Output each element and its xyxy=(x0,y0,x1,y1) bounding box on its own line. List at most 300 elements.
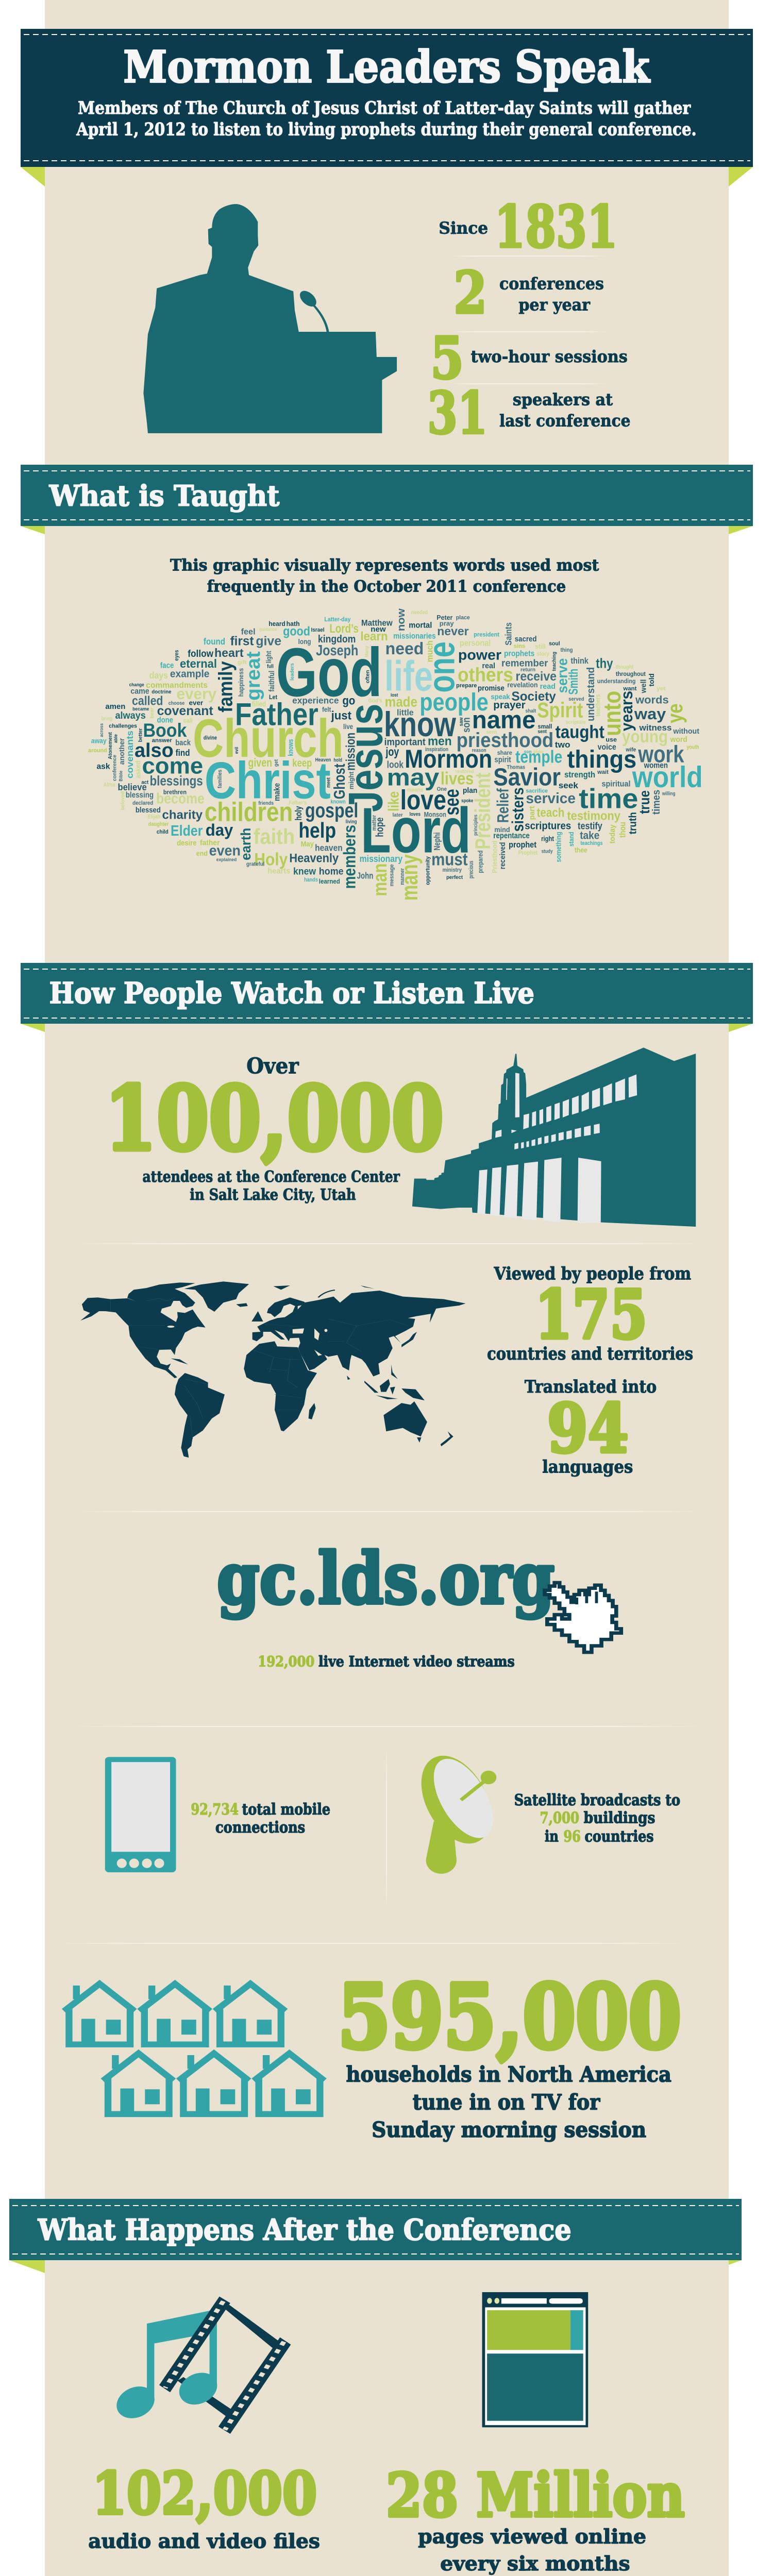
word cloud: repentance xyxy=(493,832,530,840)
word cloud: family xyxy=(214,661,237,713)
word cloud: home xyxy=(319,866,344,877)
word cloud: ask xyxy=(97,762,110,771)
word cloud: share xyxy=(497,749,512,756)
word cloud: times xyxy=(650,790,662,815)
word cloud intro text xyxy=(170,556,599,596)
word cloud: testimony xyxy=(567,809,621,823)
word cloud: get xyxy=(274,759,279,767)
word cloud: new xyxy=(371,625,386,633)
word cloud: beloved xyxy=(120,791,126,810)
word cloud: Nephi xyxy=(432,833,442,851)
word cloud: later xyxy=(393,812,403,818)
word cloud: may xyxy=(387,765,439,791)
word cloud: must xyxy=(431,850,468,869)
word cloud: face xyxy=(160,662,174,670)
word cloud: God’s xyxy=(368,698,382,704)
word cloud: many xyxy=(397,854,423,901)
word cloud: guidance xyxy=(259,626,277,632)
word cloud: Ghost xyxy=(330,764,348,799)
word cloud: made xyxy=(385,694,417,710)
stat: 595,000 households: Sunday morning session xyxy=(372,2117,646,2142)
word cloud: meet xyxy=(326,777,331,788)
word cloud: great xyxy=(242,651,264,701)
website callout: gc.lds.org xyxy=(217,1537,621,1670)
stat: 102,000 files: 102,000 xyxy=(92,2460,317,2528)
word cloud: hath xyxy=(287,620,300,628)
stat: mobile connections: connections xyxy=(215,1818,305,1836)
word cloud: Lord xyxy=(361,795,471,867)
word cloud: Church xyxy=(193,708,344,769)
header ribbon xyxy=(21,29,753,187)
word cloud: told xyxy=(648,673,656,686)
word cloud: strength xyxy=(564,770,595,779)
word cloud: want xyxy=(623,685,637,692)
word cloud: seen xyxy=(486,730,497,735)
word cloud: seek xyxy=(559,781,578,790)
word cloud: experience xyxy=(292,696,339,706)
word cloud: joy xyxy=(385,745,399,758)
word cloud: earth xyxy=(238,828,254,860)
section heading: How People Watch or Listen Live xyxy=(21,963,753,1032)
word cloud: served xyxy=(568,697,584,702)
word cloud: covenants xyxy=(125,731,135,778)
word cloud: found xyxy=(204,636,225,647)
stat: 175 countries, 94 languages: languages xyxy=(542,1457,633,1477)
word cloud: days xyxy=(149,670,168,681)
word cloud: came xyxy=(130,687,149,696)
word cloud: evil xyxy=(234,747,239,754)
stat: 100,000 attendees: attendees at the Conference Center xyxy=(142,1168,400,1186)
stat: live video streams: 192,000 xyxy=(258,1653,314,1670)
word cloud: young xyxy=(622,726,668,747)
word cloud: part xyxy=(528,806,536,820)
word cloud: one xyxy=(422,641,462,693)
word cloud: charity xyxy=(162,808,203,822)
word cloud: temple xyxy=(515,747,562,767)
section heading: How People Watch or Listen Live: How People Watch or Listen Live xyxy=(49,976,534,1010)
icon: Conference Center building xyxy=(412,1047,696,1227)
stat: 175 countries, 94 languages: Translated into xyxy=(525,1377,657,1397)
word cloud: happiness xyxy=(237,668,245,697)
word cloud: something xyxy=(554,832,563,862)
word cloud: help xyxy=(298,818,336,842)
word cloud: felt xyxy=(322,706,331,713)
word cloud: way xyxy=(634,705,666,723)
word cloud: thou xyxy=(618,822,628,838)
word cloud: Lord’s xyxy=(329,622,359,635)
word cloud: explained xyxy=(216,857,237,862)
word cloud: Peter xyxy=(436,614,453,621)
section heading: What is Taught xyxy=(21,465,753,534)
icon: web browser xyxy=(482,2292,588,2427)
stat: 595,000 households: households in North America xyxy=(346,2061,671,2087)
word cloud: never xyxy=(437,625,469,638)
word cloud: back xyxy=(175,738,191,748)
word cloud: place xyxy=(456,615,470,621)
word cloud: power xyxy=(458,647,501,663)
word cloud: needed xyxy=(411,610,428,616)
word cloud: restored xyxy=(456,769,474,775)
word cloud: know xyxy=(384,704,456,744)
word cloud: Bible xyxy=(118,771,123,782)
word cloud: daughter xyxy=(148,821,169,827)
word cloud: teach xyxy=(536,805,564,820)
word cloud: Society xyxy=(512,689,556,704)
word cloud: plan xyxy=(463,787,477,795)
word cloud: day xyxy=(206,821,233,839)
word cloud: Smith xyxy=(566,669,581,694)
word cloud: speak xyxy=(491,693,510,701)
word cloud: kingdom xyxy=(318,633,356,645)
word cloud: Holy xyxy=(254,850,288,869)
word cloud: every xyxy=(176,685,216,703)
word cloud: around xyxy=(88,748,107,754)
world map xyxy=(80,1281,466,1458)
word cloud: time xyxy=(579,783,638,814)
word cloud: wife xyxy=(625,747,636,753)
word cloud: heard xyxy=(268,620,285,628)
word cloud: receive xyxy=(515,669,557,684)
word cloud: children xyxy=(205,796,293,826)
word cloud: across xyxy=(99,723,104,737)
word cloud: scripture xyxy=(565,720,586,725)
word cloud: knew xyxy=(293,866,316,877)
word cloud: child xyxy=(157,829,169,835)
stat: mobile connections: total mobile xyxy=(242,1800,330,1819)
word cloud: youth xyxy=(687,744,699,751)
word cloud: full xyxy=(267,664,274,670)
word cloud: well xyxy=(640,680,648,693)
word cloud: two xyxy=(555,740,570,750)
word cloud: just xyxy=(331,709,351,722)
word cloud: ye xyxy=(664,704,687,723)
word cloud: people xyxy=(419,688,489,716)
word cloud: long xyxy=(298,638,311,646)
word cloud: Savior xyxy=(493,763,561,791)
word cloud: always xyxy=(115,710,146,721)
word cloud: thought xyxy=(616,664,634,670)
stat list: conference facts: two-hour sessions xyxy=(471,347,628,366)
word cloud: story xyxy=(536,651,550,657)
word cloud: ever xyxy=(189,699,203,707)
word cloud: President xyxy=(472,773,495,850)
word cloud: thee xyxy=(575,846,587,854)
word cloud: word xyxy=(670,736,687,744)
website callout: gc.lds.org: gc.lds.org xyxy=(217,1537,554,1620)
word cloud: example xyxy=(170,669,209,680)
word cloud: thy xyxy=(596,656,613,671)
word cloud: brethren xyxy=(163,789,187,796)
word cloud: Book xyxy=(143,720,187,741)
stat: 175 countries, 94 languages: 94 xyxy=(547,1389,629,1468)
word cloud: hold xyxy=(333,757,342,763)
word cloud: able xyxy=(113,734,119,743)
word cloud: done xyxy=(157,716,173,725)
word cloud: willing xyxy=(662,791,676,796)
word cloud: change xyxy=(129,682,144,687)
word cloud: Thomas xyxy=(507,764,525,770)
word cloud: Christ xyxy=(205,751,331,809)
word cloud: also xyxy=(135,739,174,761)
word cloud: son xyxy=(461,717,473,733)
word cloud: Priesthood xyxy=(491,841,498,873)
word cloud: Let xyxy=(269,693,277,701)
word cloud: learned xyxy=(319,877,340,885)
word cloud: became xyxy=(132,706,149,711)
word cloud: men xyxy=(428,734,452,748)
word cloud: heaven xyxy=(315,842,343,853)
word cloud: challenges xyxy=(109,723,137,729)
word cloud: Monson xyxy=(424,810,446,819)
word cloud: asked xyxy=(134,761,142,778)
word cloud: prophets xyxy=(504,649,534,658)
word cloud: opportunity xyxy=(424,856,431,885)
word cloud: make xyxy=(273,783,281,801)
word cloud: Heavenly xyxy=(289,852,339,866)
word cloud: go xyxy=(342,694,355,707)
word cloud: priesthood xyxy=(457,728,553,751)
word cloud: Alma xyxy=(104,782,115,788)
word cloud: remember xyxy=(501,658,548,669)
word cloud: president xyxy=(474,631,500,638)
word cloud: Elijah xyxy=(147,814,160,820)
word cloud: taught xyxy=(556,722,604,742)
word cloud: spoke xyxy=(461,798,473,804)
word cloud: things xyxy=(567,745,636,773)
word cloud: serve xyxy=(554,658,570,693)
word cloud: without xyxy=(673,727,699,736)
word cloud: Heaven xyxy=(315,757,331,762)
word cloud: world xyxy=(632,760,703,794)
word cloud: sent xyxy=(538,729,547,735)
stat list: conference facts: 31 xyxy=(427,379,488,447)
icon: hand cursor xyxy=(545,1583,621,1652)
word cloud: throughout xyxy=(616,670,646,677)
stat: 175 countries, 94 languages: 175 xyxy=(535,1275,647,1354)
stat: 595,000 households xyxy=(338,1966,681,2142)
word cloud: small xyxy=(538,723,552,730)
word cloud: hope xyxy=(374,817,385,837)
word cloud: little xyxy=(397,708,414,718)
word cloud: find xyxy=(176,748,190,758)
word cloud: Matthew xyxy=(361,619,393,628)
stat: satellite broadcasts: in xyxy=(545,1827,559,1845)
word cloud: service xyxy=(526,790,576,807)
word cloud: testify xyxy=(578,821,602,832)
word cloud: manner xyxy=(399,868,406,885)
stat list: conference facts: 5 xyxy=(430,325,464,393)
word cloud: Saints xyxy=(503,622,514,646)
word cloud: bear xyxy=(149,707,155,718)
word cloud: years xyxy=(617,691,636,731)
word cloud: read xyxy=(540,682,556,691)
word cloud: today xyxy=(608,824,617,843)
word cloud: matter xyxy=(372,815,377,831)
stat: live video streams: live Internet video streams xyxy=(318,1653,515,1670)
word cloud: use xyxy=(606,736,617,743)
word cloud: words xyxy=(635,693,669,706)
stat: 28 Million pages: pages viewed online xyxy=(418,2525,646,2548)
stat: satellite broadcasts xyxy=(514,1791,680,1845)
word cloud: Many xyxy=(364,646,369,657)
word cloud: learn xyxy=(360,629,388,643)
word cloud: saw xyxy=(459,717,464,726)
word cloud: precious xyxy=(468,861,475,878)
word cloud: act xyxy=(141,779,149,785)
word cloud: light xyxy=(265,651,273,663)
word cloud: Israel xyxy=(311,627,325,633)
stat list: conference facts: 2 xyxy=(453,259,487,327)
word cloud: John xyxy=(357,871,373,881)
stat: 595,000 households: tune in on TV for xyxy=(413,2089,600,2114)
word cloud: choose xyxy=(169,701,185,706)
stat: mobile connections: 92,734 xyxy=(191,1800,239,1819)
word cloud: scriptures xyxy=(525,820,571,832)
word cloud: living xyxy=(346,819,357,824)
stat: 100,000 attendees: Over xyxy=(246,1053,299,1079)
word cloud: sacred xyxy=(515,635,536,643)
word cloud: better xyxy=(138,728,144,742)
word cloud: true xyxy=(636,790,652,814)
word cloud: doctrine xyxy=(152,689,172,695)
word cloud: eternal xyxy=(180,657,217,670)
word cloud: Spirit xyxy=(537,698,583,722)
word cloud: stand xyxy=(567,832,575,846)
word cloud intro text: frequently in the October 2011 conference xyxy=(207,577,566,596)
word cloud: man xyxy=(369,863,391,896)
word cloud: answer xyxy=(152,738,172,744)
word cloud: others xyxy=(458,664,513,686)
word cloud: life xyxy=(384,653,433,700)
word cloud: gospel xyxy=(305,799,358,822)
word cloud: live xyxy=(343,722,353,731)
word cloud: Latter-day xyxy=(324,616,351,623)
word cloud: inspiration xyxy=(425,747,448,753)
word cloud: mission xyxy=(343,733,358,771)
word cloud: even xyxy=(209,842,241,858)
word cloud: covenant xyxy=(157,704,213,718)
word cloud: blessings xyxy=(149,773,203,788)
word cloud: desire xyxy=(177,839,197,848)
word cloud: called xyxy=(132,693,163,708)
stat list: conference facts xyxy=(427,193,630,447)
stat: satellite broadcasts: countries xyxy=(585,1827,653,1845)
word cloud: sacrifice xyxy=(526,787,548,794)
stat list: conference facts: per year xyxy=(518,296,591,315)
word cloud: eyes xyxy=(174,650,180,661)
word cloud: lives xyxy=(441,769,474,788)
word cloud: prayer xyxy=(493,700,525,711)
word cloud: prophet xyxy=(509,840,536,850)
word cloud: given xyxy=(248,756,272,769)
stat: 175 countries, 94 languages xyxy=(487,1264,693,1477)
word cloud: Jesus xyxy=(339,704,393,812)
word cloud: take xyxy=(580,829,599,841)
word cloud: follow xyxy=(188,649,213,659)
word cloud: witness xyxy=(638,723,672,733)
stat list: conference facts: speakers at xyxy=(513,390,613,409)
word cloud: leaders xyxy=(290,663,295,681)
word cloud: pray xyxy=(440,620,454,628)
word cloud: name xyxy=(472,706,535,734)
word cloud: important xyxy=(384,737,426,748)
stat: 28 Million pages xyxy=(386,2460,685,2575)
word cloud: Prophet xyxy=(518,849,538,856)
word cloud: bring xyxy=(102,716,112,722)
word cloud: knows xyxy=(287,739,295,756)
word cloud: revelation xyxy=(507,681,538,689)
word cloud: Atonement xyxy=(108,732,113,759)
stat: 100,000 attendees: 100,000 xyxy=(105,1067,444,1171)
word cloud: voice xyxy=(598,742,616,752)
word cloud: feel xyxy=(241,627,256,637)
word cloud: conference xyxy=(112,755,117,781)
icon: six houses xyxy=(64,1984,324,2114)
word cloud: another xyxy=(118,738,126,765)
word cloud: still xyxy=(535,643,546,650)
word cloud: study xyxy=(542,849,553,855)
word cloud: thing xyxy=(560,646,573,653)
word cloud: truth xyxy=(627,812,638,834)
icon: speaker at podium silhouette xyxy=(143,204,397,433)
word cloud: first xyxy=(230,634,254,649)
word cloud: give xyxy=(256,634,281,649)
word cloud: message xyxy=(388,864,395,886)
word cloud: believe xyxy=(117,782,147,792)
word cloud: understanding xyxy=(597,677,635,685)
word cloud: women xyxy=(644,761,668,770)
word cloud: look xyxy=(387,759,404,770)
stat: 102,000 files: audio and video files xyxy=(88,2530,320,2553)
word cloud: often xyxy=(365,670,371,683)
word cloud: away xyxy=(91,737,107,745)
stat: satellite broadcasts: 96 xyxy=(563,1827,581,1845)
word cloud: divine xyxy=(204,735,217,741)
word cloud: amen xyxy=(105,703,125,711)
word cloud: now xyxy=(395,608,407,631)
word cloud: perfect xyxy=(446,875,463,880)
word cloud: unto xyxy=(598,691,626,736)
word cloud: lost xyxy=(391,692,398,698)
word cloud: son xyxy=(524,749,532,755)
word cloud: One xyxy=(437,786,447,792)
icon: mobile phone xyxy=(105,1757,176,1872)
word cloud: work xyxy=(638,741,684,768)
word cloud: prepare xyxy=(456,683,477,689)
stat: 28 Million pages: every six months xyxy=(440,2552,630,2575)
word cloud: Elder xyxy=(171,822,203,839)
stat list: conference facts: 1831 xyxy=(494,193,618,261)
word cloud: sins xyxy=(514,643,525,649)
word cloud: yet xyxy=(657,685,665,692)
stat list: conference facts: conferences xyxy=(499,274,604,293)
word cloud: declared xyxy=(132,800,153,806)
word cloud: become xyxy=(156,791,205,807)
word cloud: call xyxy=(183,717,193,724)
word cloud: teachings xyxy=(580,840,603,846)
word cloud: families xyxy=(217,770,223,788)
word cloud: personal xyxy=(460,638,491,648)
word cloud: holy xyxy=(293,806,304,821)
word cloud: see xyxy=(441,789,463,816)
stat list: conference facts: Since xyxy=(439,218,488,238)
word cloud: might xyxy=(348,771,356,789)
icon: music note and film strip xyxy=(109,2296,291,2434)
word cloud: faith xyxy=(254,824,295,849)
word cloud: means xyxy=(407,787,424,793)
word cloud: mind xyxy=(494,826,510,834)
word cloud: spiritual xyxy=(602,780,630,788)
